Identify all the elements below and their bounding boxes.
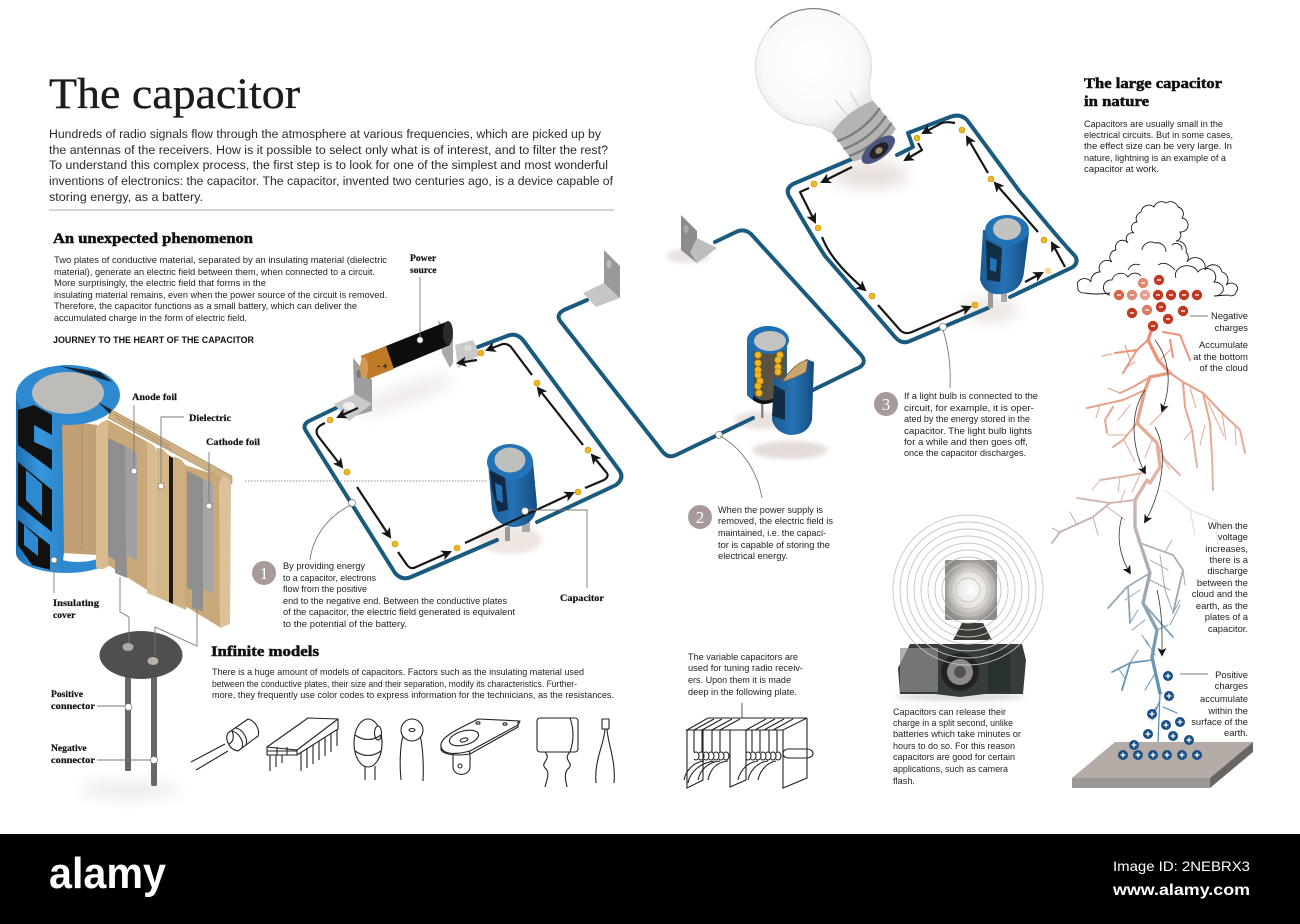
icon: axial capacitor — [191, 719, 259, 770]
foil panel A — [108, 420, 157, 597]
foil to connector leader lines — [120, 577, 197, 655]
left bracket — [604, 250, 620, 298]
label: positive charges: earth. — [1224, 727, 1248, 738]
blue shell — [16, 395, 64, 572]
lightning bolt — [1052, 326, 1245, 743]
flash waves — [893, 515, 1043, 665]
step 3 text: If a light bulb is connected to the — [904, 390, 1038, 401]
step 3 text: ated by the energy stored in the — [904, 413, 1030, 424]
stored charge dots — [755, 352, 783, 396]
label: positive connector: Positive — [51, 689, 84, 700]
text: voltage increases: plates of a — [1205, 611, 1249, 622]
subheading: journey: JOURNEY TO THE HEART OF THE CAPACITOR — [53, 335, 255, 345]
step 1 text: end to the negative end. Between the conductive plates — [283, 595, 507, 606]
label: insulating cover: cover — [53, 610, 76, 621]
heading: large capacitor: The large capacitor — [1084, 76, 1222, 92]
bottom ring — [16, 533, 116, 573]
intro text block: the antennas of the receivers. How is it possible to select only what is of interest, and to filter the rest? — [49, 143, 608, 157]
circuit 2: power removed — [559, 215, 864, 459]
label: negative charges — [1190, 310, 1248, 333]
label: negative connector — [51, 743, 158, 766]
label: positive charges: surface of the — [1191, 716, 1248, 727]
icon: ceramic capacitor — [354, 719, 382, 780]
phenomenon text block: accumulated charge in the form of electric field. — [54, 312, 247, 323]
flash text: capacitors are good for certain — [893, 751, 1015, 762]
large capacitor text — [1084, 118, 1233, 174]
icon: mounting plate capacitor — [441, 719, 520, 774]
dotted link from capacitor to cutaway — [245, 480, 487, 482]
split capacitor back half — [747, 326, 789, 418]
circuit 1: battery charging — [305, 320, 621, 578]
text: accumulate: Accumulate — [1199, 339, 1248, 350]
circuit 3: bulb connected — [755, 9, 1077, 342]
infinite models text — [212, 666, 614, 700]
big capacitor cutaway — [16, 365, 232, 628]
large capacitor text: capacitor at work. — [1084, 163, 1159, 174]
label: insulating cover — [51, 557, 99, 621]
phenomenon text block: material), generate an electric field between them, when connected to a circuit. — [54, 266, 375, 277]
text: voltage increases: increases, — [1205, 543, 1248, 554]
intro text block: Hundreds of radio signals flow through the atmosphere at various frequencies, which are picked up by — [49, 127, 602, 141]
infinite models text: more, they frequently use color codes to express information for the technicians, as the resistances. — [212, 689, 614, 700]
step 3 text: circuit, for example, it is oper- — [904, 402, 1034, 413]
label: power source: Power — [410, 253, 437, 264]
large capacitor text: electrical circuits. But in some cases, — [1084, 129, 1233, 140]
heading: large capacitor: in nature — [1084, 94, 1149, 110]
label: dielectric — [158, 413, 232, 489]
flash text: batteries which take minutes or — [893, 728, 1021, 739]
icon: bead capacitor — [596, 719, 614, 783]
flash text — [893, 706, 1021, 786]
connector disc with legs — [80, 631, 182, 800]
inner rolled foil — [62, 420, 97, 555]
text: voltage increases: cloud and the — [1192, 588, 1248, 599]
footer bar — [0, 834, 1300, 924]
icon: disc capacitor — [400, 719, 423, 781]
label: anode foil: Anode foil — [132, 392, 177, 403]
split capacitor front half — [772, 359, 814, 435]
capacitor — [487, 444, 537, 541]
large capacitor text: nature, lightning is an example of a — [1084, 152, 1227, 163]
step 1 text: By providing energy — [283, 560, 365, 571]
label: cathode foil — [206, 437, 260, 509]
text: voltage increases: capacitor. — [1208, 623, 1248, 634]
step 2 text: tor is capable of storing the — [718, 539, 830, 550]
flash head — [945, 560, 997, 620]
flash text: applications, such as camera — [893, 763, 1009, 774]
variable capacitor text: ers. Upon them it is made — [688, 674, 791, 685]
icon: variable capacitor — [684, 703, 813, 788]
gap — [157, 448, 186, 610]
left bracket — [353, 358, 372, 416]
text: voltage increases: between the — [1197, 577, 1248, 588]
phenomenon text block: More surprisingly, the electric field that forms in the — [54, 277, 266, 288]
phenomenon text block — [54, 254, 387, 323]
step 2 text: electrical energy. — [718, 550, 788, 561]
step 3 text: capacitor. The light bulb lights — [904, 425, 1032, 436]
label: dielectric: Dielectric — [189, 413, 232, 424]
step 3 text: 3 — [882, 395, 890, 414]
variable capacitor text: deep in the following plate. — [688, 686, 797, 697]
intro text block — [49, 127, 614, 204]
intro text block: To understand this complex process, the first step is to look for one of the simplest and most wonderful — [49, 158, 608, 172]
label: positive connector — [51, 689, 132, 712]
dielectric pleats — [157, 448, 168, 600]
heading: an unexpected phenomenon: An unexpected phenomenon — [53, 231, 254, 247]
step 1 text: to the potential of the battery. — [283, 618, 407, 629]
step 1 text: 1 — [260, 564, 268, 583]
large capacitor text: Capacitors are usually small in the — [1084, 118, 1223, 129]
first pleat — [96, 420, 110, 569]
intro text block: inventions of electronics: the capacitor. The capacitor, invented two centuries ago, is a device capable of — [49, 174, 614, 188]
footer image id: Image ID: 2NEBRX3 — [1113, 858, 1250, 874]
current arrows — [800, 122, 1065, 333]
right bracket — [681, 215, 697, 263]
label: positive charges: accumulate — [1200, 693, 1248, 704]
label: negative charges: Negative — [1211, 310, 1248, 321]
light bulb — [755, 9, 905, 173]
step 2 text — [688, 436, 833, 561]
step 1 text — [252, 505, 515, 629]
battery — [360, 321, 453, 379]
flash text: Capacitors can release their — [893, 706, 1006, 717]
back edges of foils — [108, 410, 232, 484]
icon: film capacitor — [537, 718, 578, 787]
label: positive charges: Positive — [1215, 669, 1248, 680]
step 3 text: once the capacitor discharges. — [904, 447, 1026, 458]
cathode strip — [187, 471, 203, 611]
step 3 text: for a while and then goes off, — [904, 436, 1028, 447]
intro text block: storing energy, as a battery. — [49, 190, 203, 204]
capacitor — [980, 215, 1029, 308]
text: voltage increases: discharge — [1207, 565, 1248, 576]
flash text: flash. — [893, 775, 915, 786]
infinite models text: between the conductive plates, their size and their separation, modify its characteristics. Further- — [212, 678, 577, 689]
label: negative connector: connector — [51, 755, 96, 766]
heading: infinite models: Infinite models — [211, 644, 319, 660]
step 2 text: 2 — [696, 508, 704, 527]
label: negative connector: Negative — [51, 743, 87, 754]
step 3 text — [874, 330, 1038, 458]
text: voltage increases: earth, as the — [1196, 600, 1248, 611]
label: insulating cover: Insulating — [53, 598, 99, 609]
flash text: hours to do so. For this reason — [893, 740, 1015, 751]
footer logo: alamy — [49, 849, 166, 898]
icon: chip capacitor — [267, 718, 338, 771]
title: The capacitor — [49, 71, 300, 118]
label: negative charges: charges — [1215, 322, 1248, 333]
foil panel B — [185, 465, 231, 628]
text: accumulate: of the cloud — [1200, 362, 1248, 373]
large capacitor text: the effect size can be very large. In — [1084, 140, 1232, 151]
lightning direction arrows — [1119, 340, 1168, 655]
negative charges — [1114, 275, 1202, 331]
electron dots — [327, 350, 591, 551]
phenomenon text block: insulating material remains, even when the power source of the circuit is removed. — [54, 289, 387, 300]
label: capacitor — [529, 510, 605, 604]
footer url: www.alamy.com — [1112, 882, 1250, 899]
anode strip — [108, 438, 127, 578]
step 1 text: flow from the positive — [283, 583, 367, 594]
camera body — [898, 644, 1026, 697]
shell black pattern — [18, 405, 52, 570]
label: positive charges: charges — [1215, 680, 1248, 691]
battery: - + — [377, 361, 388, 371]
positive charges — [1118, 671, 1202, 760]
text: accumulate: at the bottom — [1193, 351, 1248, 362]
label: positive connector: connector — [51, 701, 96, 712]
label: capacitor: Capacitor — [560, 593, 605, 604]
text: voltage increases: When the — [1208, 520, 1248, 531]
label: cathode foil: Cathode foil — [206, 437, 260, 448]
step 1 text: of the capacitor, the electric field generated is equivalent — [283, 606, 515, 617]
camera with flash — [893, 515, 1043, 701]
right bracket — [438, 320, 453, 368]
phenomenon text block: Therefore, the capacitor functions as a small battery, which can deliver the — [54, 300, 357, 311]
phenomenon text block: Two plates of conductive material, separated by an insulating material (dielectric — [54, 254, 387, 265]
heading: large capacitor — [1084, 76, 1222, 110]
flash text: charge in a split second, unlike — [893, 717, 1013, 728]
variable capacitor text — [688, 651, 803, 697]
wire — [305, 335, 621, 578]
wire — [559, 230, 864, 456]
step 1 text: to a capacitor, electrons — [283, 572, 376, 583]
label: positive charges — [1180, 669, 1248, 738]
storm cloud — [1077, 202, 1238, 296]
step 2 text: maintained, i.e. the capaci- — [718, 527, 826, 538]
text: voltage increases: voltage — [1218, 531, 1248, 542]
current arrows — [317, 344, 608, 568]
electron dots — [811, 127, 1051, 308]
text: accumulate — [1193, 339, 1248, 373]
text: voltage increases: there is a — [1209, 554, 1249, 565]
label: power source: source — [410, 265, 437, 276]
label: positive charges: within the — [1207, 705, 1248, 716]
wire — [788, 116, 1077, 342]
label: anode foil — [131, 392, 177, 474]
label: power source — [410, 253, 437, 337]
step 2 text: When the power supply is — [718, 504, 823, 515]
earth slab — [1072, 742, 1253, 788]
step 2 text: removed, the electric field is — [718, 515, 833, 526]
text: voltage increases — [1192, 520, 1249, 634]
variable capacitor text: The variable capacitors are — [688, 651, 798, 662]
infinite models text: There is a huge amount of models of capacitors. Factors such as the insulating material used — [212, 666, 584, 677]
variable capacitor text: used for tuning radio receiv- — [688, 662, 803, 673]
